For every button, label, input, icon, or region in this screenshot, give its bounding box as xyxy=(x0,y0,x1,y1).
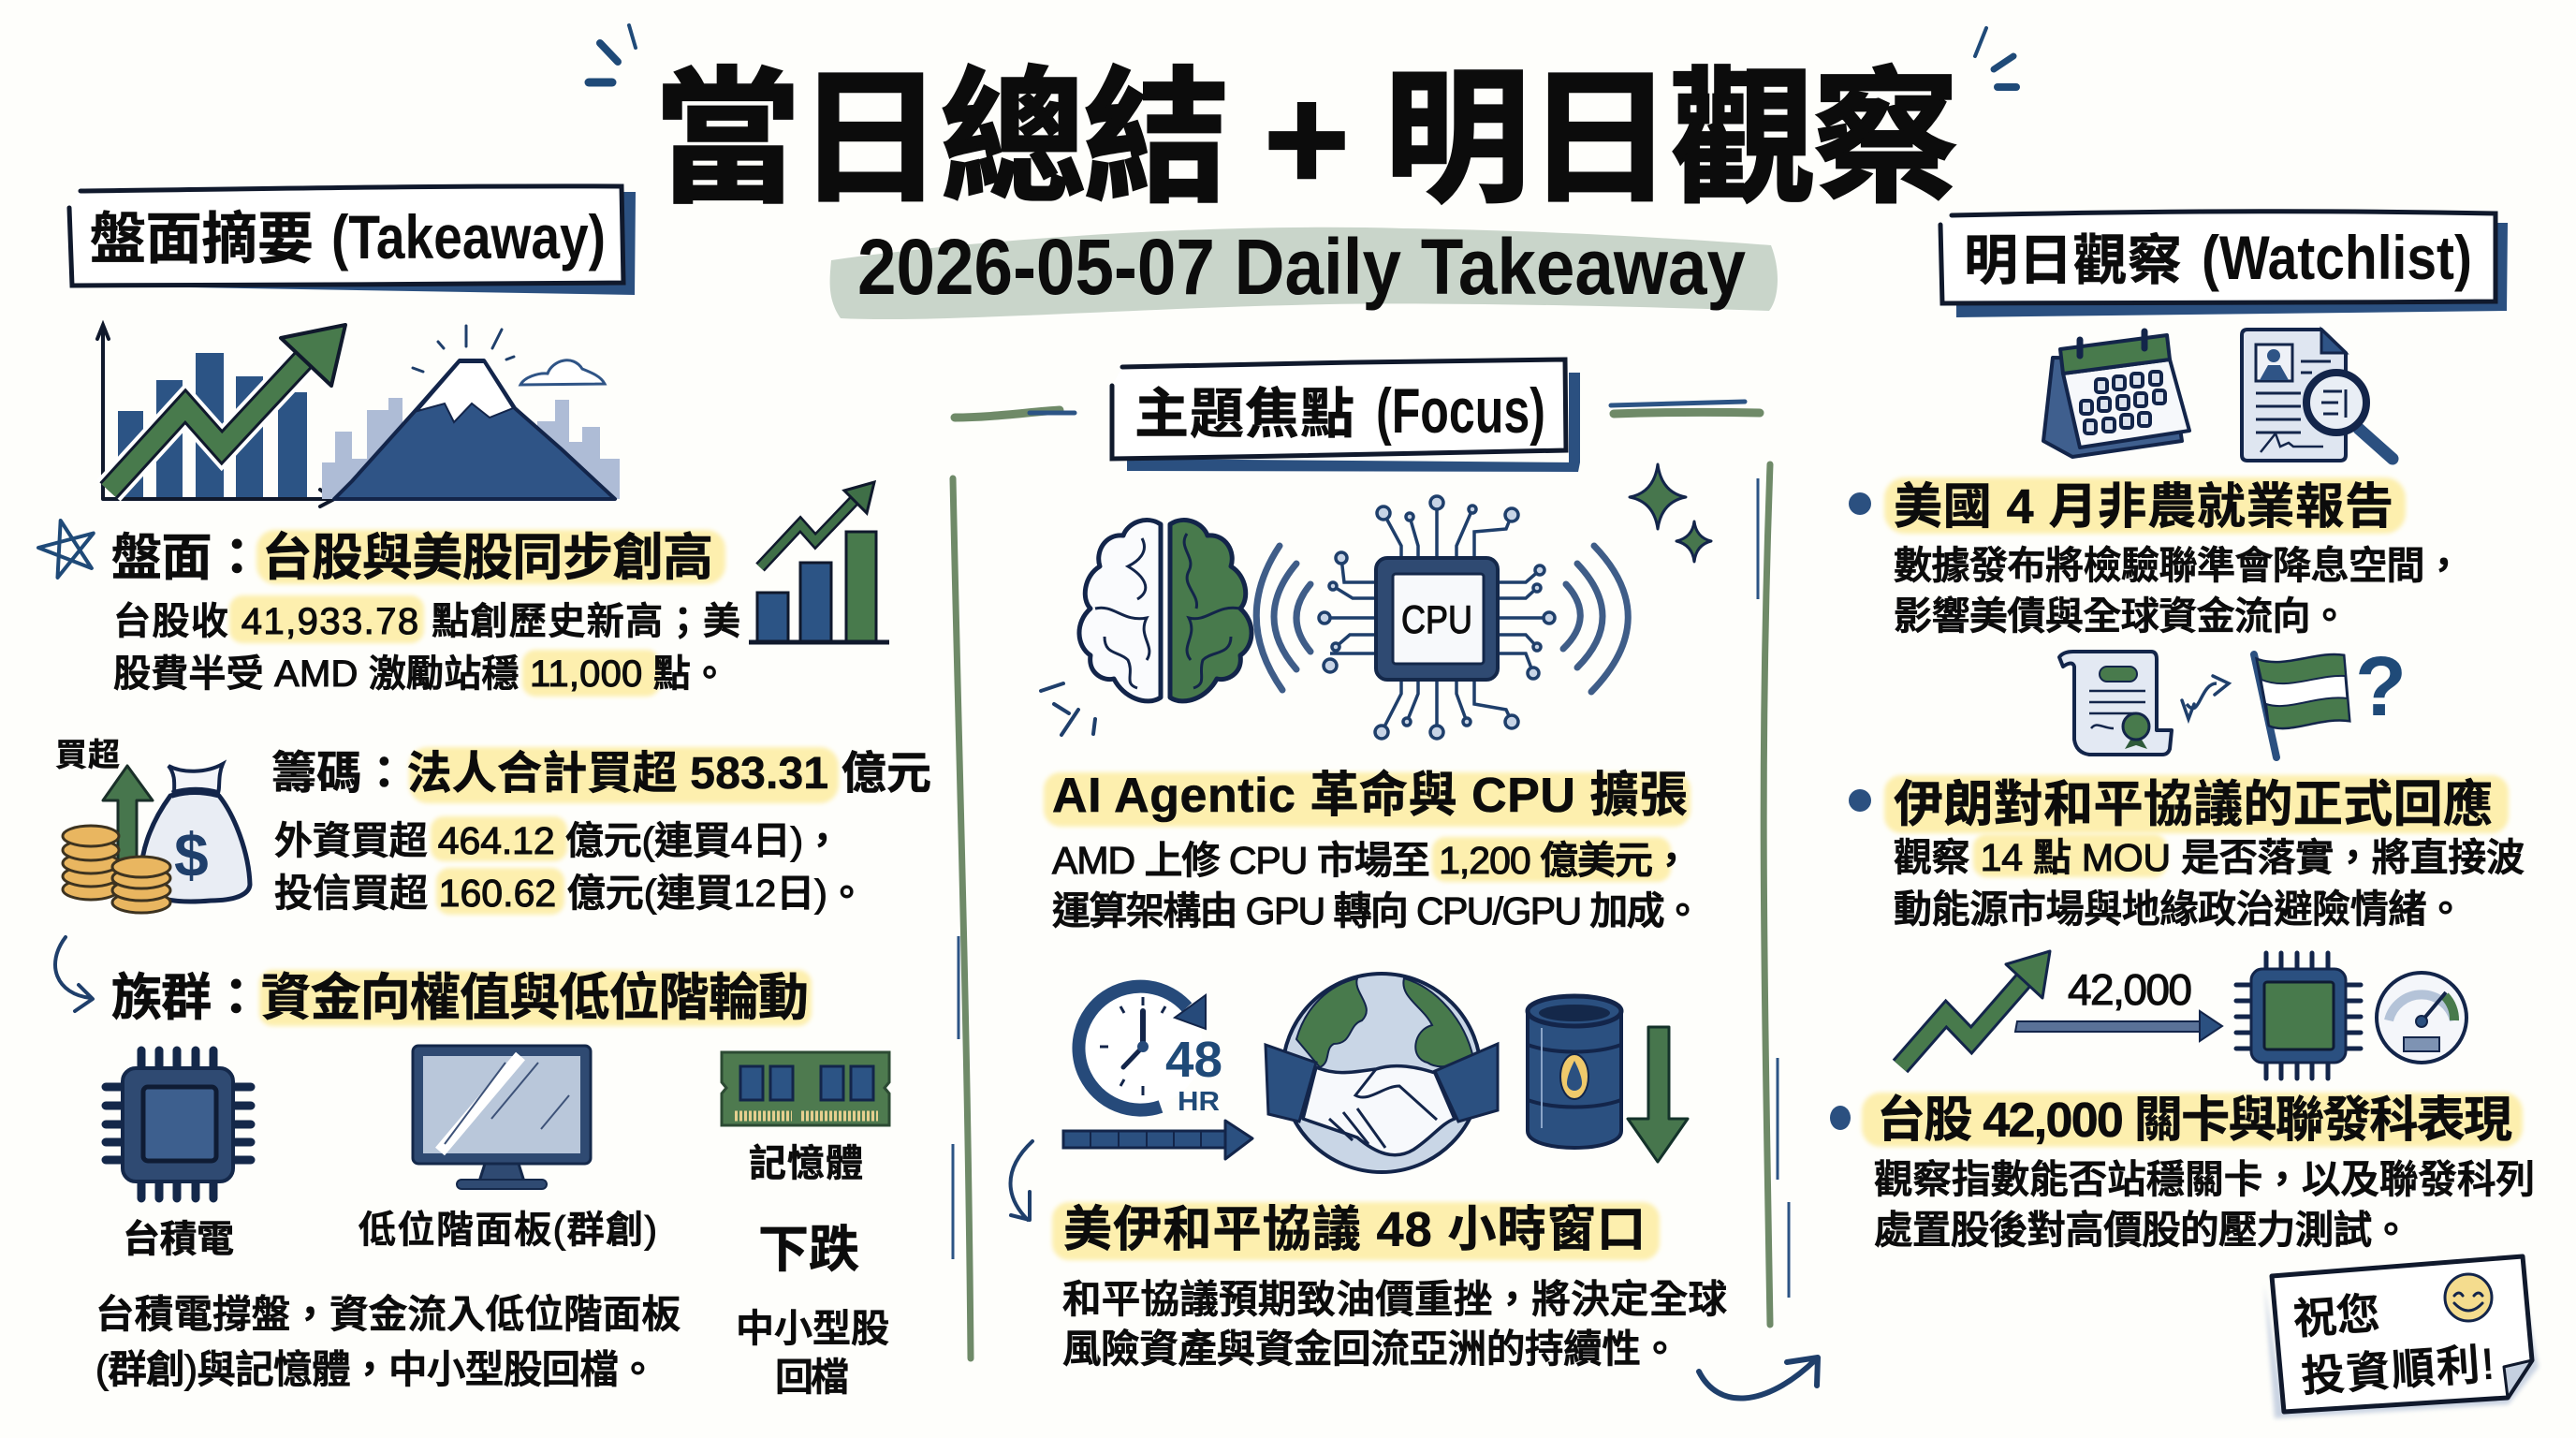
arrow: curved to watchlist xyxy=(1699,1357,1818,1399)
label: small and mid caps xyxy=(736,1307,889,1399)
icon: 48-hour clock: 48 xyxy=(1165,1032,1222,1088)
nonfarm highlight xyxy=(1884,477,2406,534)
heading: takeaway: (Takeaway) xyxy=(331,202,606,271)
sectors body xyxy=(95,1292,681,1391)
header: title and date xyxy=(589,25,2016,319)
panel frame lines xyxy=(953,402,1789,1358)
market highlight xyxy=(256,530,725,584)
icon: star xyxy=(38,521,94,578)
label: small and mid caps: 回檔 xyxy=(775,1356,849,1399)
icon: brain xyxy=(1041,521,1251,735)
chips body: 外資買超 464.12 億元(連買4日)， xyxy=(274,819,842,862)
chips heading: 籌碼：法人合計買超 583.31 億元 xyxy=(271,749,931,799)
AI body: 運算架構由 GPU 轉向 CPU/GPU 加成。 xyxy=(1052,889,1702,932)
peace body: 和平協議預期致油價重挫，將決定全球 xyxy=(1062,1277,1727,1321)
sectors highlight xyxy=(259,970,812,1026)
nonfarm heading: 美國 4 月非農就業報告 xyxy=(1894,480,2393,535)
heading: takeaway: 盤面摘要 xyxy=(90,208,314,271)
Iran body xyxy=(1894,834,2525,931)
icon: calendar xyxy=(2043,331,2189,457)
peace heading: 美伊和平協議 48 小時窗口 xyxy=(1063,1203,1646,1257)
icon: 42,000 level xyxy=(1900,951,2222,1066)
bullet xyxy=(1830,1106,1851,1130)
nonfarm body: 影響美債與全球資金流向。 xyxy=(1894,594,2349,638)
icon: small bar chart xyxy=(749,482,889,642)
nonfarm body xyxy=(1894,544,2463,638)
icon: report with magnifier xyxy=(2242,330,2393,461)
heading: watchlist: (Watchlist) xyxy=(2202,223,2472,292)
note: good luck: 投資順利! xyxy=(2300,1339,2496,1401)
icon: oil barrel xyxy=(1528,996,1621,1148)
label: memory: 記憶體 xyxy=(749,1143,863,1184)
chips body: 投信買超 160.62 億元(連買12日)。 xyxy=(274,872,866,915)
note: good luck xyxy=(2264,1256,2539,1418)
market heading: 盤面：台股與美股同步創高 xyxy=(111,530,713,586)
label: net buy: 買超 xyxy=(55,738,120,773)
TAIEX heading: 台股 42,000 關卡與聯發科表現 xyxy=(1877,1093,2512,1148)
item: nonfarm payrolls xyxy=(1849,477,2463,638)
item: peace deal xyxy=(1011,1141,1818,1399)
sectors heading: 族群：資金向權值與低位階輪動 xyxy=(111,970,809,1026)
TAIEX body: 處置股後對高價股的壓力測試。 xyxy=(1874,1208,2410,1252)
icon: green chip xyxy=(2236,953,2361,1078)
arrow: curved to sectors xyxy=(55,937,93,1011)
item: market xyxy=(38,482,889,697)
chips highlight xyxy=(409,747,839,803)
sparks: right of title xyxy=(1975,28,2016,87)
heading: takeaway xyxy=(69,186,636,295)
icon: sparkles xyxy=(1630,464,1711,562)
icon: money bag and coins: $ xyxy=(174,820,209,889)
signal arcs xyxy=(1256,546,1628,692)
arrow: timeline xyxy=(1063,1121,1252,1159)
icon: gauge xyxy=(2377,973,2466,1063)
TAIEX highlight xyxy=(1862,1093,2523,1147)
heading: watchlist: 明日觀察 xyxy=(1964,230,2182,291)
icon: TSMC chip xyxy=(106,1050,251,1198)
Iran body: 觀察 14 點 MOU 是否落實，將直接波 xyxy=(1894,836,2525,879)
sparks: left of title xyxy=(589,25,636,82)
label: TSMC: 台積電 xyxy=(123,1219,234,1260)
icon: money bag and coins xyxy=(63,764,250,913)
Iran heading: 伊朗對和平協議的正式回應 xyxy=(1894,777,2493,832)
item: chips flow xyxy=(55,738,931,915)
arrow: oil down xyxy=(1628,1027,1688,1162)
item: Iran response xyxy=(1849,775,2525,931)
TAIEX body: 觀察指數能否站穩關卡，以及聯發科列 xyxy=(1874,1157,2535,1201)
Iran body: 動能源市場與地緣政治避險情緒。 xyxy=(1894,888,2465,931)
icon: CPU: CPU xyxy=(1401,597,1472,641)
TAIEX body xyxy=(1874,1157,2535,1252)
heading: watchlist xyxy=(1940,212,2508,317)
peace body: 風險資產與資金回流亞洲的持續性。 xyxy=(1062,1327,1679,1371)
bullet xyxy=(1849,789,1871,812)
market body: 股費半受 AMD 激勵站穩 11,000 點。 xyxy=(113,653,728,695)
sectors body: 台積電撐盤，資金流入低位階面板 xyxy=(95,1292,681,1336)
icon: CPU xyxy=(1319,496,1555,739)
AI body: AMD 上修 CPU 市場至 1,200 億美元， xyxy=(1052,839,1690,882)
date banner: 2026-05-07 Daily Takeaway xyxy=(857,223,1746,311)
nonfarm body: 數據發布將檢驗聯準會降息空間， xyxy=(1894,544,2463,587)
peace body xyxy=(1062,1277,1727,1371)
panel: takeaway xyxy=(38,186,931,1399)
heading: focus: (Focus) xyxy=(1376,375,1545,447)
sectors body: (群創)與記憶體，中小型股回檔。 xyxy=(95,1347,657,1391)
icon: globe handshake xyxy=(1266,974,1498,1172)
chart: rising bars xyxy=(97,325,345,506)
icon: scroll and flag xyxy=(2059,640,2407,757)
market body: 台股收 41,933.78 點創歷史新高；美 xyxy=(113,601,740,642)
note: good luck: 祝您 xyxy=(2291,1289,2381,1343)
panel: focus xyxy=(953,360,1818,1399)
label: falling: 下跌 xyxy=(758,1222,859,1278)
icon: 48-hour clock: HR xyxy=(1178,1087,1220,1117)
heading: focus: 主題焦點 xyxy=(1134,384,1354,445)
market body xyxy=(113,595,740,697)
panel: watchlist xyxy=(1830,212,2539,1418)
label: small and mid caps: 中小型股 xyxy=(736,1307,889,1350)
item: TAIEX 42,000 xyxy=(1830,1093,2535,1252)
icon: scroll and flag: ? xyxy=(2355,640,2407,734)
peace highlight xyxy=(1052,1202,1660,1260)
icon: 42,000 level: 42,000 xyxy=(2068,965,2192,1014)
AI heading: AI Agentic 革命與 CPU 擴張 xyxy=(1052,769,1688,823)
icon: memory module xyxy=(722,1052,889,1125)
item: AI agentic xyxy=(1044,769,1702,932)
label: low-end panel: 低位階面板(群創) xyxy=(359,1210,657,1251)
icon: mountain and skyline xyxy=(322,326,620,499)
heading: focus xyxy=(1112,360,1580,472)
icon: monitor panel xyxy=(413,1046,591,1189)
item: sectors xyxy=(55,937,889,1399)
Iran highlight xyxy=(1884,775,2509,833)
icon: 48-hour clock xyxy=(1078,987,1222,1117)
AI highlight xyxy=(1044,772,1690,827)
bullet xyxy=(1849,492,1871,515)
title: 當日總結 + 明日觀察 xyxy=(654,58,1959,221)
chips body xyxy=(274,816,866,915)
arrow: curved to peace deal xyxy=(1011,1141,1032,1220)
AI body xyxy=(1052,837,1702,932)
